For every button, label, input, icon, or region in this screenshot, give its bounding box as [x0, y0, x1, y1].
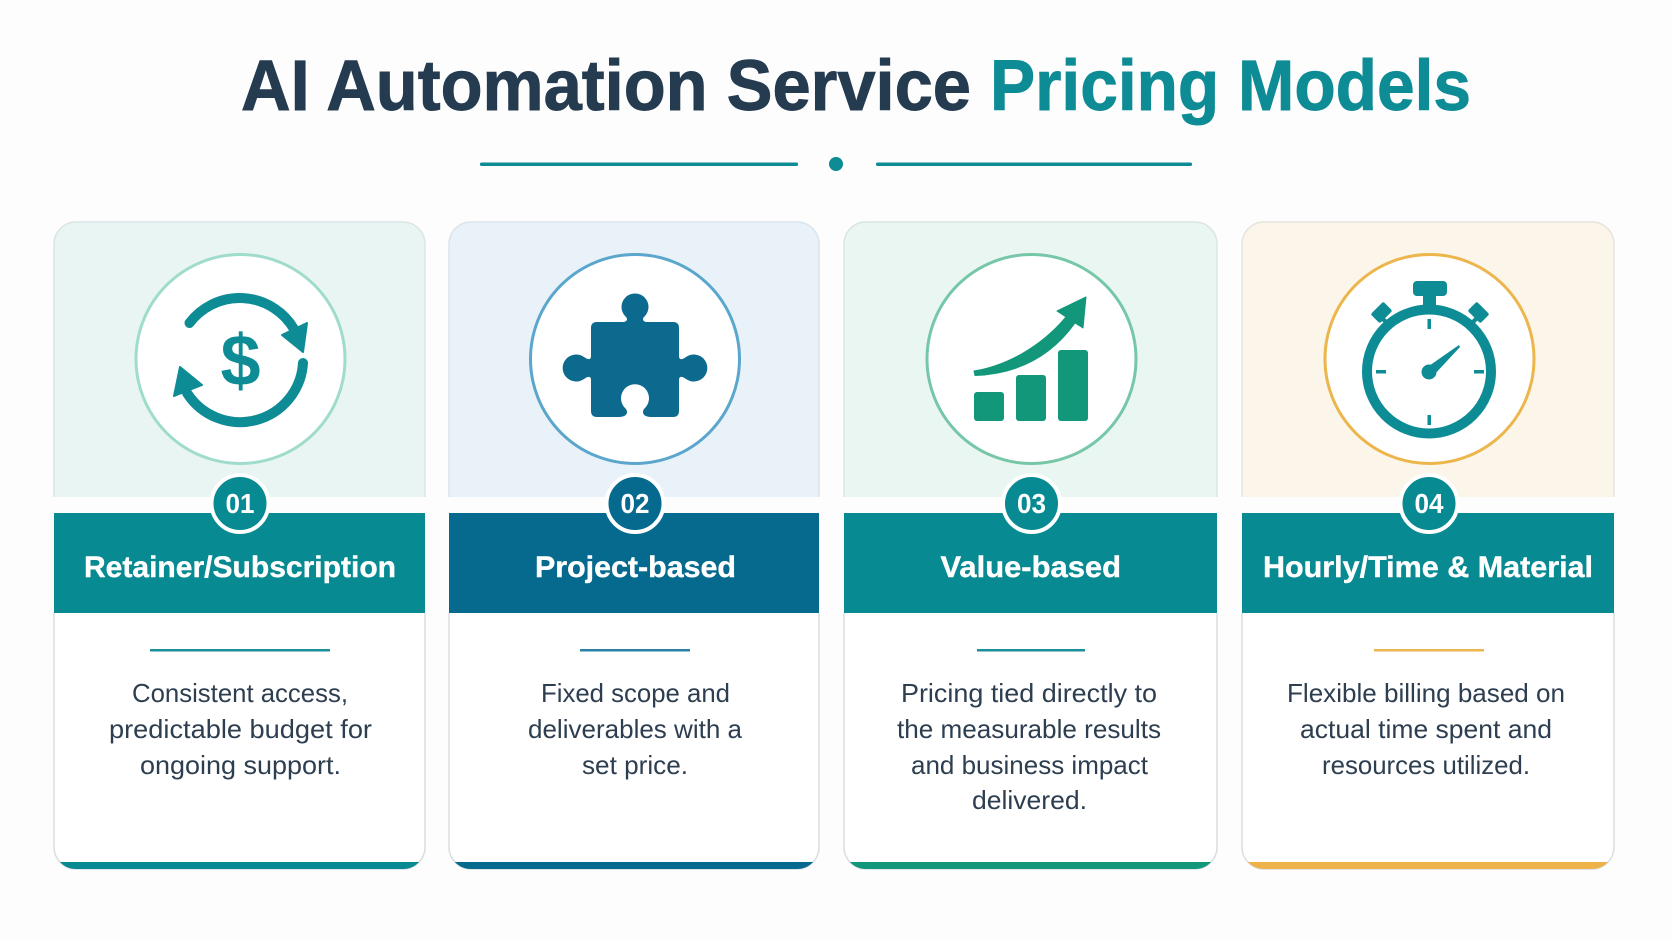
description 3 — [897, 678, 1161, 815]
icon circle 4 — [1325, 254, 1534, 464]
card 3 lower body — [844, 613, 1217, 869]
title: AI Automation Service — [241, 47, 971, 126]
description 1: Consistent access, — [132, 678, 348, 708]
icon: recurring dollar: $ — [220, 321, 261, 401]
heading 2: Project-based — [535, 551, 736, 584]
panel: Hourly/Time & Material — [1242, 222, 1614, 869]
number badge 3: 03 — [1017, 488, 1046, 519]
card 1 lower body — [54, 613, 425, 869]
panel: Value-based — [844, 222, 1217, 869]
card 4 lower body — [1242, 613, 1614, 869]
description 2: deliverables with a — [528, 714, 743, 744]
description 1: ongoing support. — [140, 750, 341, 780]
panel: Project-based — [449, 222, 819, 869]
number badge 1: 01 — [226, 488, 254, 519]
description 3: delivered. — [972, 785, 1087, 815]
title divider — [480, 157, 1192, 171]
description 4: resources utilized. — [1322, 750, 1530, 780]
icon circle 3 — [927, 254, 1136, 464]
heading 1: Retainer/Subscription — [84, 551, 396, 584]
description 1 — [109, 678, 372, 780]
number badge 3 — [1003, 475, 1060, 532]
heading 4: Hourly/Time & Material — [1263, 551, 1593, 584]
description 2 — [528, 678, 743, 780]
card 2 lower body — [449, 613, 819, 869]
description 3: the measurable results — [897, 714, 1161, 744]
header band 1 — [54, 513, 425, 613]
icon circle 1 — [136, 254, 345, 464]
description 4: actual time spent and — [1300, 714, 1552, 744]
number badge 4 — [1400, 475, 1458, 532]
description 4 — [1287, 678, 1565, 780]
card 1 tinted top — [54, 222, 425, 497]
title — [241, 47, 1471, 126]
description 1: predictable budget for — [109, 714, 372, 744]
description 2: set price. — [582, 750, 688, 780]
heading 3: Value-based — [940, 551, 1121, 584]
description 2: Fixed scope and — [541, 678, 730, 708]
header band 4 — [1242, 513, 1614, 613]
number badge 1 — [212, 475, 268, 532]
header band 2 — [449, 513, 819, 613]
icon: stopwatch — [1367, 281, 1491, 434]
description 3: and business impact — [911, 750, 1149, 780]
icon circle 2 — [530, 254, 740, 464]
accent bar 1 — [60, 862, 419, 869]
rule 4 — [1374, 649, 1484, 652]
accent bar 4 — [1248, 862, 1608, 869]
rule 3 — [977, 649, 1085, 652]
number badge 4: 04 — [1414, 488, 1444, 519]
card 2 tinted top — [449, 222, 819, 497]
rule 2 — [580, 649, 690, 652]
header band 3 — [844, 513, 1217, 613]
card 3 tinted top — [844, 222, 1217, 497]
accent bar 2 — [455, 862, 813, 869]
card 4 tinted top — [1242, 222, 1614, 497]
icon: recurring dollar — [174, 298, 307, 422]
panel: Retainer/Subscription — [54, 222, 425, 869]
title: Pricing Models — [990, 47, 1471, 126]
icon: growth chart — [974, 297, 1088, 421]
description 4: Flexible billing based on — [1287, 678, 1565, 708]
rule 1 — [150, 649, 330, 652]
description 3: Pricing tied directly to — [901, 678, 1157, 708]
icon: puzzle piece — [563, 293, 707, 417]
number badge 2 — [606, 475, 664, 532]
accent bar 3 — [850, 862, 1211, 869]
number badge 2: 02 — [620, 488, 650, 519]
